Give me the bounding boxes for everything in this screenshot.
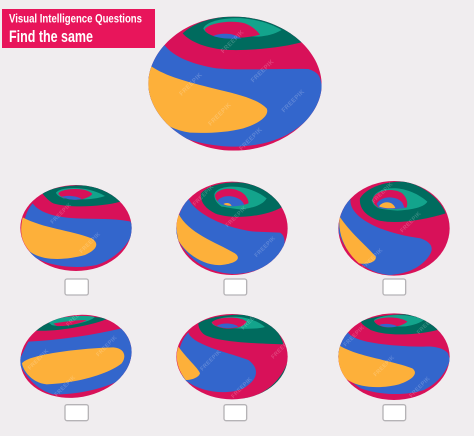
option 5: sphere and checkbox xyxy=(176,314,288,422)
option 5: sphere and checkbox: FREEPIK xyxy=(230,376,254,400)
option 1: sphere and checkbox xyxy=(17,182,137,295)
checkbox 3 xyxy=(383,279,406,295)
checkbox 1 xyxy=(65,279,88,295)
option 4: sphere and checkbox: FREEPIK xyxy=(54,374,77,398)
title banner: Visual Intelligence Questions xyxy=(9,12,142,26)
reference sphere: FREEPIK xyxy=(178,71,204,97)
reference sphere: FREEPIK xyxy=(207,101,233,127)
checkbox 5 xyxy=(224,405,247,421)
option 4: sphere and checkbox: FREEPIK xyxy=(27,348,51,371)
option 3: sphere and checkbox: FREEPIK xyxy=(371,181,395,205)
option 4: sphere and checkbox xyxy=(20,314,132,422)
option 2: sphere and checkbox: FREEPIK xyxy=(192,184,216,207)
option 6: sphere and checkbox: FREEPIK xyxy=(343,324,366,348)
title banner xyxy=(2,9,155,48)
option 3: sphere and checkbox xyxy=(334,178,452,295)
option 3: sphere and checkbox: FREEPIK xyxy=(399,210,423,234)
reference sphere: FREEPIK xyxy=(220,29,246,55)
option 2: sphere and checkbox xyxy=(173,178,292,295)
option 6: sphere and checkbox: FREEPIK xyxy=(373,354,396,378)
reference sphere: FREEPIK xyxy=(238,126,264,152)
reference sphere: FREEPIK xyxy=(280,88,306,114)
option 6: sphere and checkbox: FREEPIK xyxy=(408,375,432,399)
option 1: sphere and checkbox: FREEPIK xyxy=(79,231,102,255)
option 2: sphere and checkbox: FREEPIK xyxy=(254,235,277,259)
title banner: Find the same xyxy=(9,27,93,46)
option 5: sphere and checkbox: FREEPIK xyxy=(200,349,223,372)
option 4: sphere and checkbox: FREEPIK xyxy=(65,304,89,328)
option 1: sphere and checkbox: FREEPIK xyxy=(50,202,73,225)
option 3: sphere and checkbox: FREEPIK xyxy=(361,247,385,271)
option 2: sphere and checkbox: FREEPIK xyxy=(225,205,248,229)
reference sphere xyxy=(143,13,327,153)
option 6: sphere and checkbox xyxy=(334,310,452,421)
reference sphere: FREEPIK xyxy=(250,58,276,84)
checkbox 2 xyxy=(224,279,247,295)
option 5: sphere and checkbox: FREEPIK xyxy=(240,308,264,331)
checkbox 4 xyxy=(65,405,88,421)
option 5: sphere and checkbox: FREEPIK xyxy=(270,337,294,360)
checkbox 6 xyxy=(383,405,406,421)
option 6: sphere and checkbox: FREEPIK xyxy=(416,312,440,336)
option 4: sphere and checkbox: FREEPIK xyxy=(95,334,119,358)
